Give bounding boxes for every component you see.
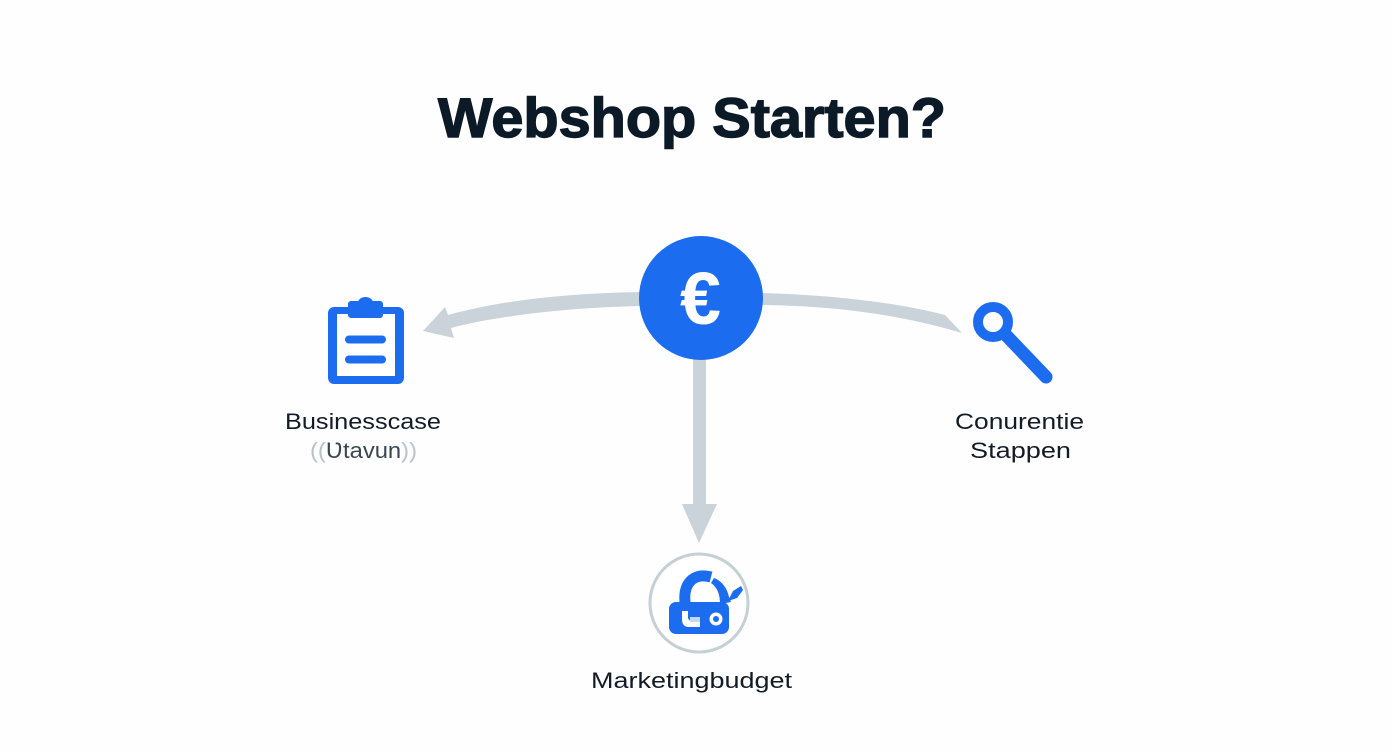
panel: concurrentie <box>955 307 1084 463</box>
label: businesscase: Businesscase <box>285 409 441 434</box>
icon: clipboard <box>328 297 404 384</box>
arrow: to concurrentie <box>762 293 962 333</box>
label: stappen: Stappen <box>970 438 1071 463</box>
central euro circle <box>639 236 763 360</box>
arrow: to businesscase <box>423 292 641 338</box>
panel: marketingbudget <box>591 554 792 693</box>
title: Webshop Starten? <box>438 86 946 149</box>
icon: magnifier <box>978 307 1046 377</box>
icon: euro sign: € <box>680 257 721 340</box>
panel: businesscase <box>285 297 441 463</box>
label: marketingbudget: Marketingbudget <box>591 668 792 693</box>
label: conurentie: Conurentie <box>955 409 1084 434</box>
arrow: to marketingbudget <box>682 358 717 543</box>
icon: ring with lock <box>650 554 748 652</box>
sublabel: garbled text: ((Ʋtavun )) <box>310 438 417 463</box>
